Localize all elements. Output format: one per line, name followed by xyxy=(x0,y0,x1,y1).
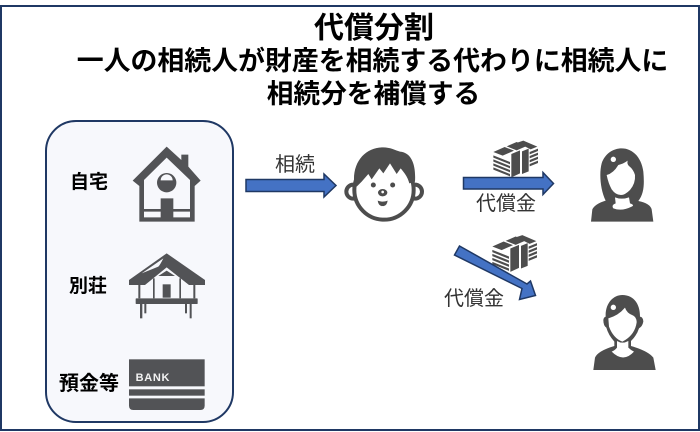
label: compensation top: 代償金 xyxy=(476,192,536,215)
icon: man xyxy=(593,295,656,370)
icon: money stack top xyxy=(493,141,538,177)
icon: money stack lower xyxy=(492,235,537,272)
label: deposits: 預金等 xyxy=(59,372,119,395)
arrow: compensation lower xyxy=(454,246,536,300)
title: 相続分を補償する xyxy=(267,79,480,109)
panel: assets xyxy=(46,121,233,422)
icon: woman xyxy=(591,148,653,222)
title: 一人の相続人が財産を相続する代わりに相続人に xyxy=(77,45,668,76)
label: compensation lower: 代償金 xyxy=(444,287,504,310)
icon: bank passbook: BANK xyxy=(136,372,170,384)
title xyxy=(77,12,668,109)
icon: bank passbook xyxy=(129,359,205,410)
icon: villa xyxy=(129,253,205,318)
arrow: inherit xyxy=(246,174,336,197)
icon: house xyxy=(133,147,201,222)
title: 代償分割 xyxy=(314,12,434,45)
arrow: compensation top xyxy=(464,172,554,194)
icon: heir boy xyxy=(346,147,422,220)
label: villa: 別荘 xyxy=(69,275,107,297)
label: home: 自宅 xyxy=(70,171,108,193)
label: inherit: 相続 xyxy=(275,153,315,176)
